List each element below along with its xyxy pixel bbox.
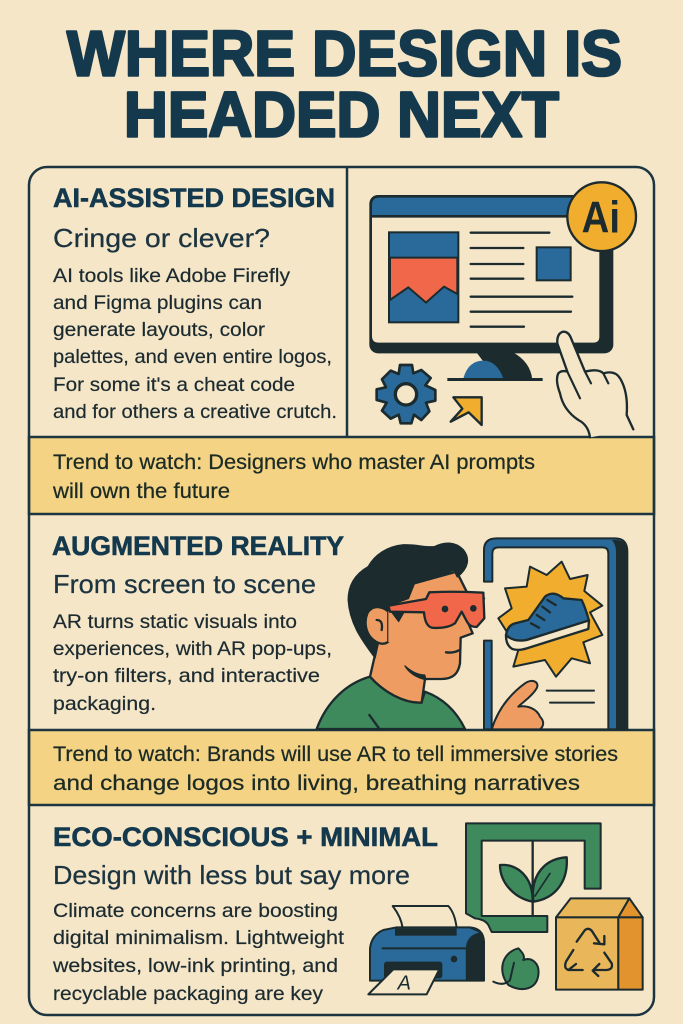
band: trend to watch, AI: will own the future — [52, 480, 230, 503]
icon: Ai badge — [567, 182, 636, 251]
body text: climate: websites, low-ink printing, and — [52, 955, 338, 977]
illustration: eco minimal objects — [368, 823, 643, 994]
body text: AR: experiences, with AR pop-ups, — [53, 638, 332, 660]
icon: monitor — [369, 195, 613, 353]
icon: monitor stand — [447, 353, 543, 381]
heading: augmented reality: AUGMENTED REALITY — [52, 531, 344, 561]
icon: person — [317, 543, 484, 730]
illustration: person with AR glasses and phone — [317, 538, 627, 730]
smile and jaw — [446, 650, 459, 653]
illustration: AI monitor — [369, 182, 636, 437]
text lines on phone — [547, 691, 594, 703]
outer frame — [29, 167, 654, 1015]
icon: starburst with shoe — [498, 562, 602, 677]
body text: AR — [53, 611, 332, 715]
column divider — [346, 167, 348, 437]
subheading: cringe or clever: Cringe or clever? — [53, 223, 270, 253]
body text: climate: Climate concerns are boosting — [53, 900, 338, 922]
body text: climate — [52, 900, 345, 1005]
band: trend to watch, AR — [29, 730, 654, 805]
band: trend to watch, AI — [29, 437, 654, 514]
neck and face — [370, 572, 484, 703]
body text: AR: AR turns static visuals into — [53, 611, 297, 633]
icon: pointing finger — [492, 681, 543, 729]
AR glasses — [388, 592, 484, 628]
body text: AI tools: and for others a creative crutch. — [53, 401, 337, 423]
heading: eco-conscious + minimal: ECO-CONSCIOUS + MINIMAL — [53, 822, 438, 852]
body text: AR: packaging. — [53, 693, 156, 715]
body text: AR: try-on filters, and interactive — [53, 665, 320, 687]
title: WHERE DESIGN IS — [67, 18, 622, 90]
body text: AI tools: generate layouts, color — [53, 319, 266, 341]
body text: AI tools: For some it's a cheat code — [53, 374, 295, 396]
icon: small leaf — [493, 948, 539, 989]
panel: augmented reality text — [52, 531, 344, 715]
subheading: design with less: Design with less but say more — [53, 860, 410, 890]
icon: phone — [484, 538, 627, 729]
band: trend to watch, AR: Trend to watch: Brands will use AR to tell immersive stories — [53, 743, 618, 766]
heading: AI-assisted design: AI-ASSISTED DESIGN — [53, 183, 335, 213]
body text: climate: digital minimalism. Lightweight — [53, 927, 345, 949]
icon: printer: A — [397, 972, 411, 994]
ear — [366, 607, 388, 644]
title: HEADED NEXT — [124, 78, 559, 150]
body text: climate: recyclable packaging are key — [53, 983, 323, 1005]
icon: printer — [368, 906, 484, 994]
icon: recycling box — [556, 898, 643, 990]
panel: AI-assisted design text — [53, 183, 337, 423]
body text: AI tools: AI tools like Adobe Firefly — [53, 265, 290, 287]
band: trend to watch, AR: and change logos into living, breathing narratives — [53, 772, 580, 795]
icon: gear — [377, 365, 435, 423]
panel: eco-conscious text — [52, 822, 438, 1005]
icon: green frame with plant — [466, 823, 601, 932]
subheading: from screen to scene: From screen to scene — [53, 569, 316, 599]
icon: cursor arrow — [451, 397, 482, 425]
band: trend to watch, AI: Trend to watch: Designers who master AI prompts — [53, 451, 535, 474]
shirt — [317, 677, 465, 729]
title — [67, 18, 622, 150]
body text: AI tools — [53, 265, 337, 423]
icon: Ai badge: Ai — [582, 193, 620, 242]
icon: pointing hand — [557, 332, 633, 437]
body text: AI tools: palettes, and even entire logos, — [53, 346, 332, 368]
hair — [348, 543, 467, 658]
body text: AI tools: and Figma plugins can — [53, 292, 262, 314]
